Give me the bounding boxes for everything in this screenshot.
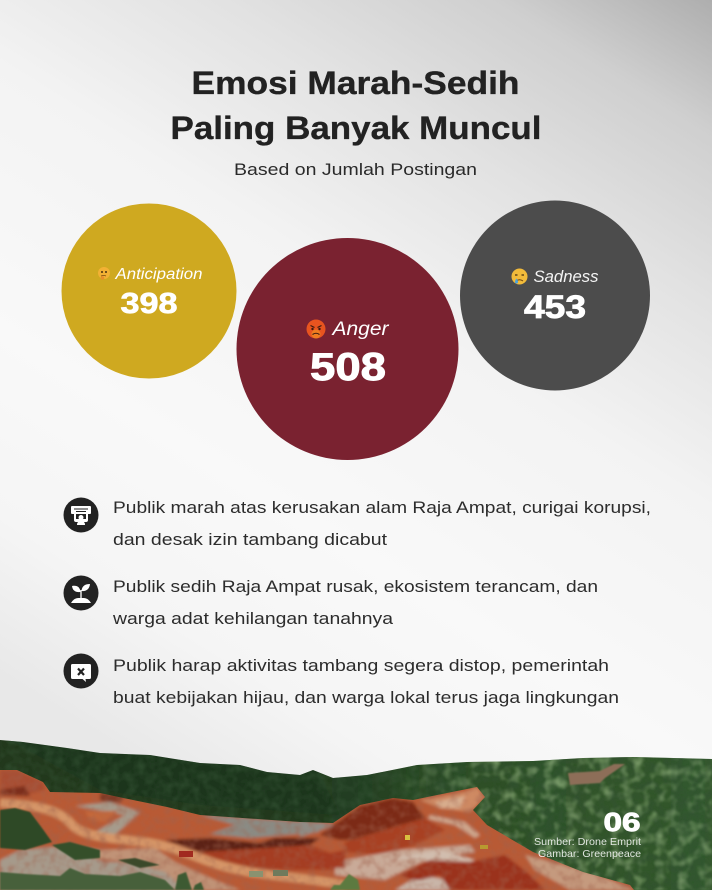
- point 2: sadness: warga adat kehilangan tanahnya: [112, 609, 394, 628]
- title: [170, 65, 542, 146]
- bubble: anger: 508: [310, 346, 386, 389]
- bubble: sadness: 453: [524, 289, 586, 325]
- point 2: sadness: Publik sedih Raja Ampat rusak, ekosistem terancam, dan: [113, 577, 598, 596]
- title: Paling Banyak Muncul: [170, 110, 542, 146]
- dark trench: [165, 838, 320, 852]
- point 1: anger: [64, 498, 651, 549]
- photo: mining landscape: [0, 735, 712, 890]
- point 3: hope: buat kebijakan hijau, dan warga lokal terus jaga lingkungan: [113, 688, 619, 707]
- point 3: hope: [64, 654, 619, 707]
- earth: [0, 765, 645, 890]
- icon: thinking face: [98, 267, 110, 280]
- lower red: [400, 855, 545, 890]
- source credit: [534, 836, 641, 860]
- bubble: anger: Anger: [331, 319, 389, 340]
- icon: crying face: [512, 268, 528, 284]
- bubble: sadness: [460, 200, 650, 390]
- page number: 06: [604, 807, 640, 837]
- pale rock: [335, 845, 475, 880]
- title: Emosi Marah-Sedih: [192, 65, 520, 101]
- bubble: anticipation: 398: [120, 288, 178, 320]
- bubble: anticipation: [62, 204, 236, 378]
- icon: speech bubble with cross: [64, 654, 98, 688]
- roadside rock: [0, 847, 200, 890]
- source credit: Gambar: Greenpeace: [538, 848, 641, 860]
- forest: [0, 735, 712, 890]
- bubble: anger: [236, 238, 458, 460]
- subtitle: Based on Jumlah Postingan: [234, 160, 477, 179]
- icon: seedling: [64, 576, 98, 610]
- icon: protest banner: [64, 498, 98, 532]
- upper road: [420, 787, 484, 812]
- soil mound: [320, 798, 425, 840]
- point 1: anger: dan desak izin tambang dicabut: [113, 530, 387, 549]
- bubble: anticipation: Anticipation: [114, 266, 202, 283]
- curved haul road: [0, 803, 345, 885]
- right slope: [525, 855, 634, 890]
- icon: angry face: [306, 320, 326, 338]
- vegetation patches: [0, 808, 360, 890]
- rubble: [200, 815, 320, 838]
- point 3: hope: Publik harap aktivitas tambang segera distop, pemerintah: [113, 656, 609, 675]
- point 2: sadness: [64, 576, 598, 628]
- trucks: [179, 835, 488, 877]
- source credit: Sumber: Drone Emprit: [534, 836, 641, 848]
- bubble: sadness: Sadness: [534, 268, 598, 286]
- exposed hillside patch: [568, 764, 625, 785]
- point 1: anger: Publik marah atas kerusakan alam Raja Ampat, curigai korupsi,: [113, 498, 651, 517]
